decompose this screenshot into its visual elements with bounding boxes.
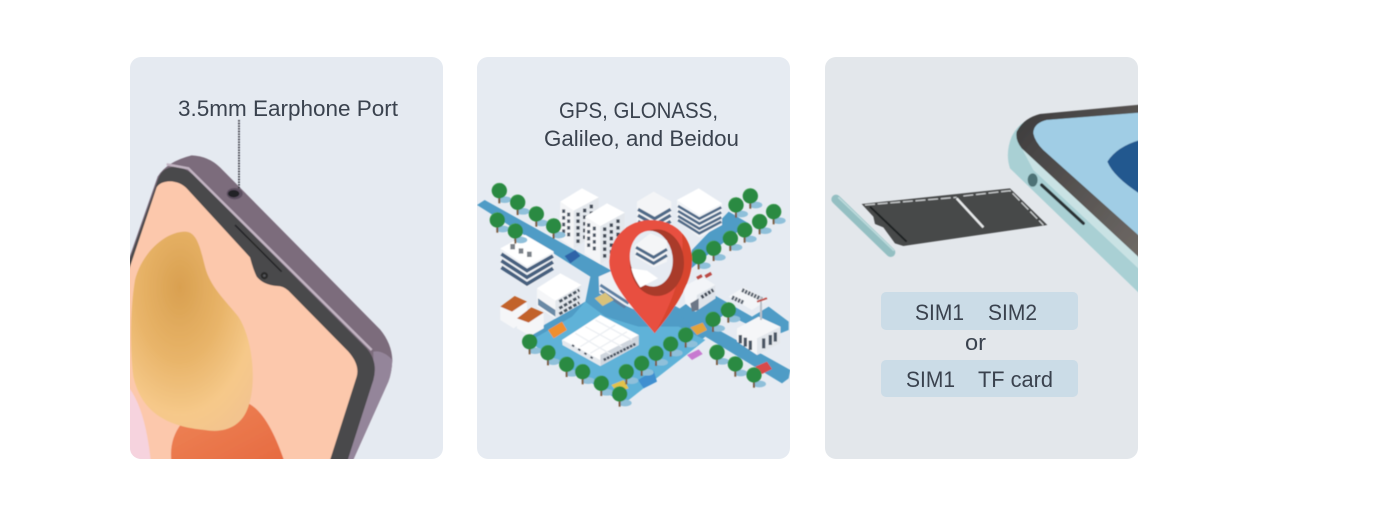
label: SIM1 SIM2: SIM1 <box>915 300 964 325</box>
heading: 3.5mm Earphone Port: 3.5mm Earphone Port <box>178 96 399 121</box>
location pin <box>609 220 692 333</box>
phone corner and SIM tray illustration <box>836 105 1140 294</box>
panel: satellite navigation <box>477 57 790 459</box>
panel: earphone port <box>125 57 443 463</box>
label: or: or <box>965 330 987 355</box>
buildings <box>500 188 780 366</box>
roads <box>477 200 790 402</box>
heading: GPS, GLONASS, Galileo, and Beidou: Galileo, and Beidou <box>544 126 739 151</box>
wallpaper shapes <box>130 388 151 459</box>
panel: SIM tray <box>825 57 1140 459</box>
earphone jack <box>227 188 243 199</box>
dotted leader line <box>236 120 241 188</box>
camera notch <box>235 225 282 279</box>
SIM tray pin bar <box>836 197 894 252</box>
vehicles <box>548 250 772 392</box>
SIM tray card plate <box>862 188 1047 246</box>
trees <box>490 183 786 407</box>
label: SIM1 SIM2: SIM2 <box>988 300 1037 325</box>
label: SIM1 TF card <box>881 360 1078 397</box>
side slot <box>1028 173 1083 223</box>
heading: GPS, GLONASS, Galileo, and Beidou <box>544 98 739 151</box>
label: SIM1 TF card: TF card <box>978 367 1053 392</box>
isometric city map <box>477 183 790 407</box>
phone frame <box>1007 124 1138 292</box>
phone illustration <box>125 120 392 463</box>
heading: GPS, GLONASS, Galileo, and Beidou: GPS, GLONASS, <box>559 98 718 123</box>
label: SIM1 SIM2 <box>881 292 1078 330</box>
label: SIM1 TF card: SIM1 <box>906 367 955 392</box>
